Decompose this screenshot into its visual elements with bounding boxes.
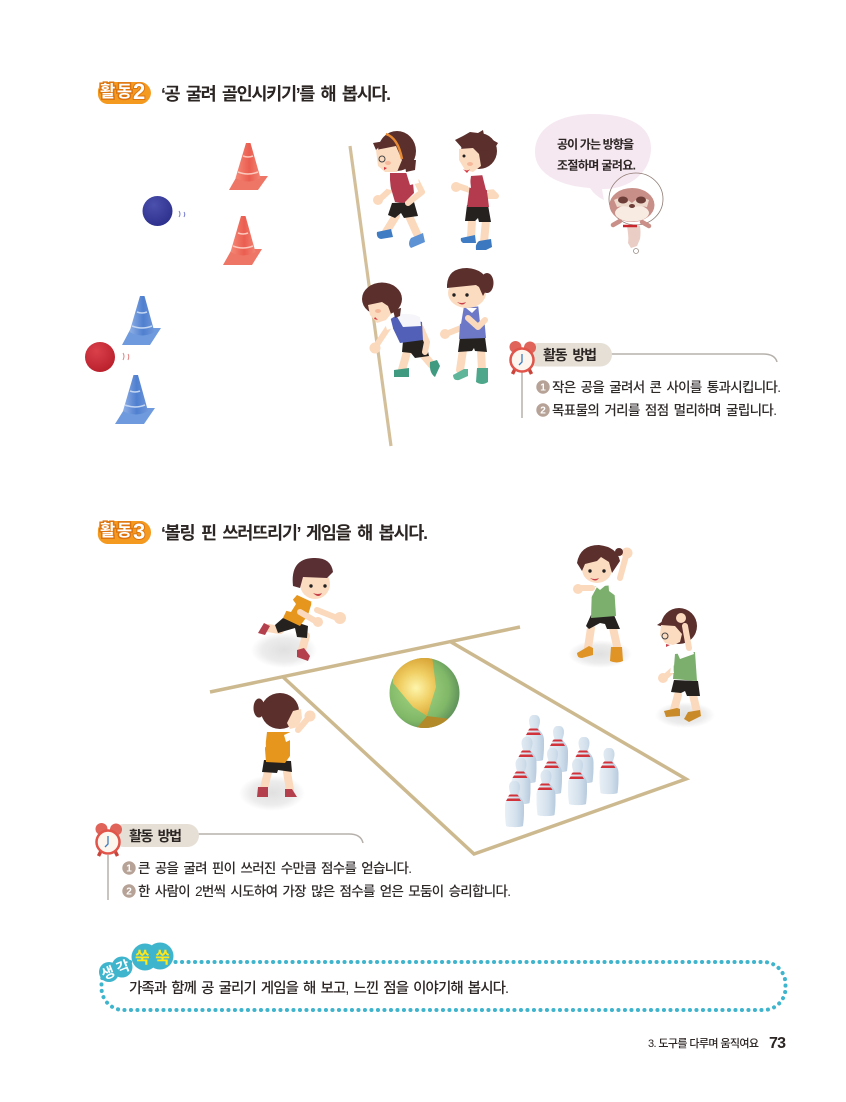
badge: 활동 2: 2 [133,79,145,104]
bubble text line 2: 조절하며 굴려요. [557,158,636,172]
badge: 활동 3 [98,519,151,544]
character: girl with ponytail, blue vest [440,268,494,384]
icon: alarm clock [510,341,536,374]
icon: red cone top [229,143,268,190]
chapter title: 3. 도구를 다루며 움직여요 [648,1037,759,1050]
icon: red cone lower [223,216,262,265]
badge: 활동 3: 활동 [100,521,132,540]
icon: red ball [85,342,115,372]
badge: 활동 2 [98,79,151,104]
bowling pins [505,715,618,827]
step 2: 목표물의 거리를 점점 멀리하며 굴립니다. [552,403,777,418]
badge: 활동 2: 활동 [100,82,132,101]
step 1: 1 [540,382,546,394]
character: girl from behind, orange vest [239,693,316,811]
character: boy, red vest [451,130,498,250]
heading text: ‘공 굴려 골인시키기’를 해 봅시다. [161,84,391,104]
prompt text: 가족과 함께 공 굴리기 게임을 해 보고, 느낀 점을 이야기해 봅시다. [129,980,509,997]
court lines: bowling lane [210,627,686,854]
badge: 생각 쑥쑥: 생각 [99,957,132,983]
character: girl cheering, green vest [568,545,632,668]
heading text: ‘볼링 핀 쓰러뜨리기’ 게임을 해 봅시다. [161,523,428,543]
character: girl with headband, red vest [373,131,425,248]
method heading: 활동 방법 [129,828,182,844]
illustration: blue cones and red ball [85,296,161,424]
footer [648,1035,786,1052]
badge: 활동 3: 3 [133,519,145,544]
rule lines [108,834,363,900]
big beach ball [390,656,460,732]
method heading: 활동 방법 [543,347,597,363]
panel: think more box [99,942,786,1010]
icon: blue cone top [122,296,161,345]
character: sloth mascot with jump rope [609,173,663,254]
page number: 73 [769,1035,786,1052]
step 1: 큰 공을 굴려 핀이 쓰러진 수만큼 점수를 얻습니다. [138,861,412,876]
pill label [112,824,199,847]
icon: blue cone lower [115,375,155,424]
character: boy with glasses, green vest [655,608,715,728]
badge: 생각 쑥쑥 [99,942,174,983]
start line: activity 2 [350,146,391,446]
bubble text line 1: 공이 가는 방향을 [557,136,634,152]
icon: ball motion marks [179,211,185,217]
panel: activity 2 method [510,341,781,418]
step 1: 작은 공을 굴려서 콘 사이를 통과시킵니다. [552,380,781,395]
icon: blue ball [142,196,172,226]
icon: red ball motion marks [123,353,129,360]
illustration: red cones and blue ball [142,143,268,265]
character: crouching child, blue vest [362,282,440,377]
section: activity 3 heading [98,519,428,544]
character: running boy, orange vest [251,558,346,668]
step 1: 1 [126,864,132,874]
badge: 생각 쑥쑥: 쑥쑥 [135,949,170,967]
step 2: 2 [540,406,546,416]
icon: alarm clock [96,823,122,856]
step 2: 한 사람이 2번씩 시도하여 가장 많은 점수를 얻은 모둠이 승리합니다. [138,884,511,899]
section: activity 2 heading [98,79,391,104]
pill label [526,343,612,366]
speech bubble [535,114,651,200]
dotted border [102,962,786,1010]
panel: activity 3 method [96,823,511,900]
step 2: 2 [126,886,132,898]
rule lines [522,354,777,418]
